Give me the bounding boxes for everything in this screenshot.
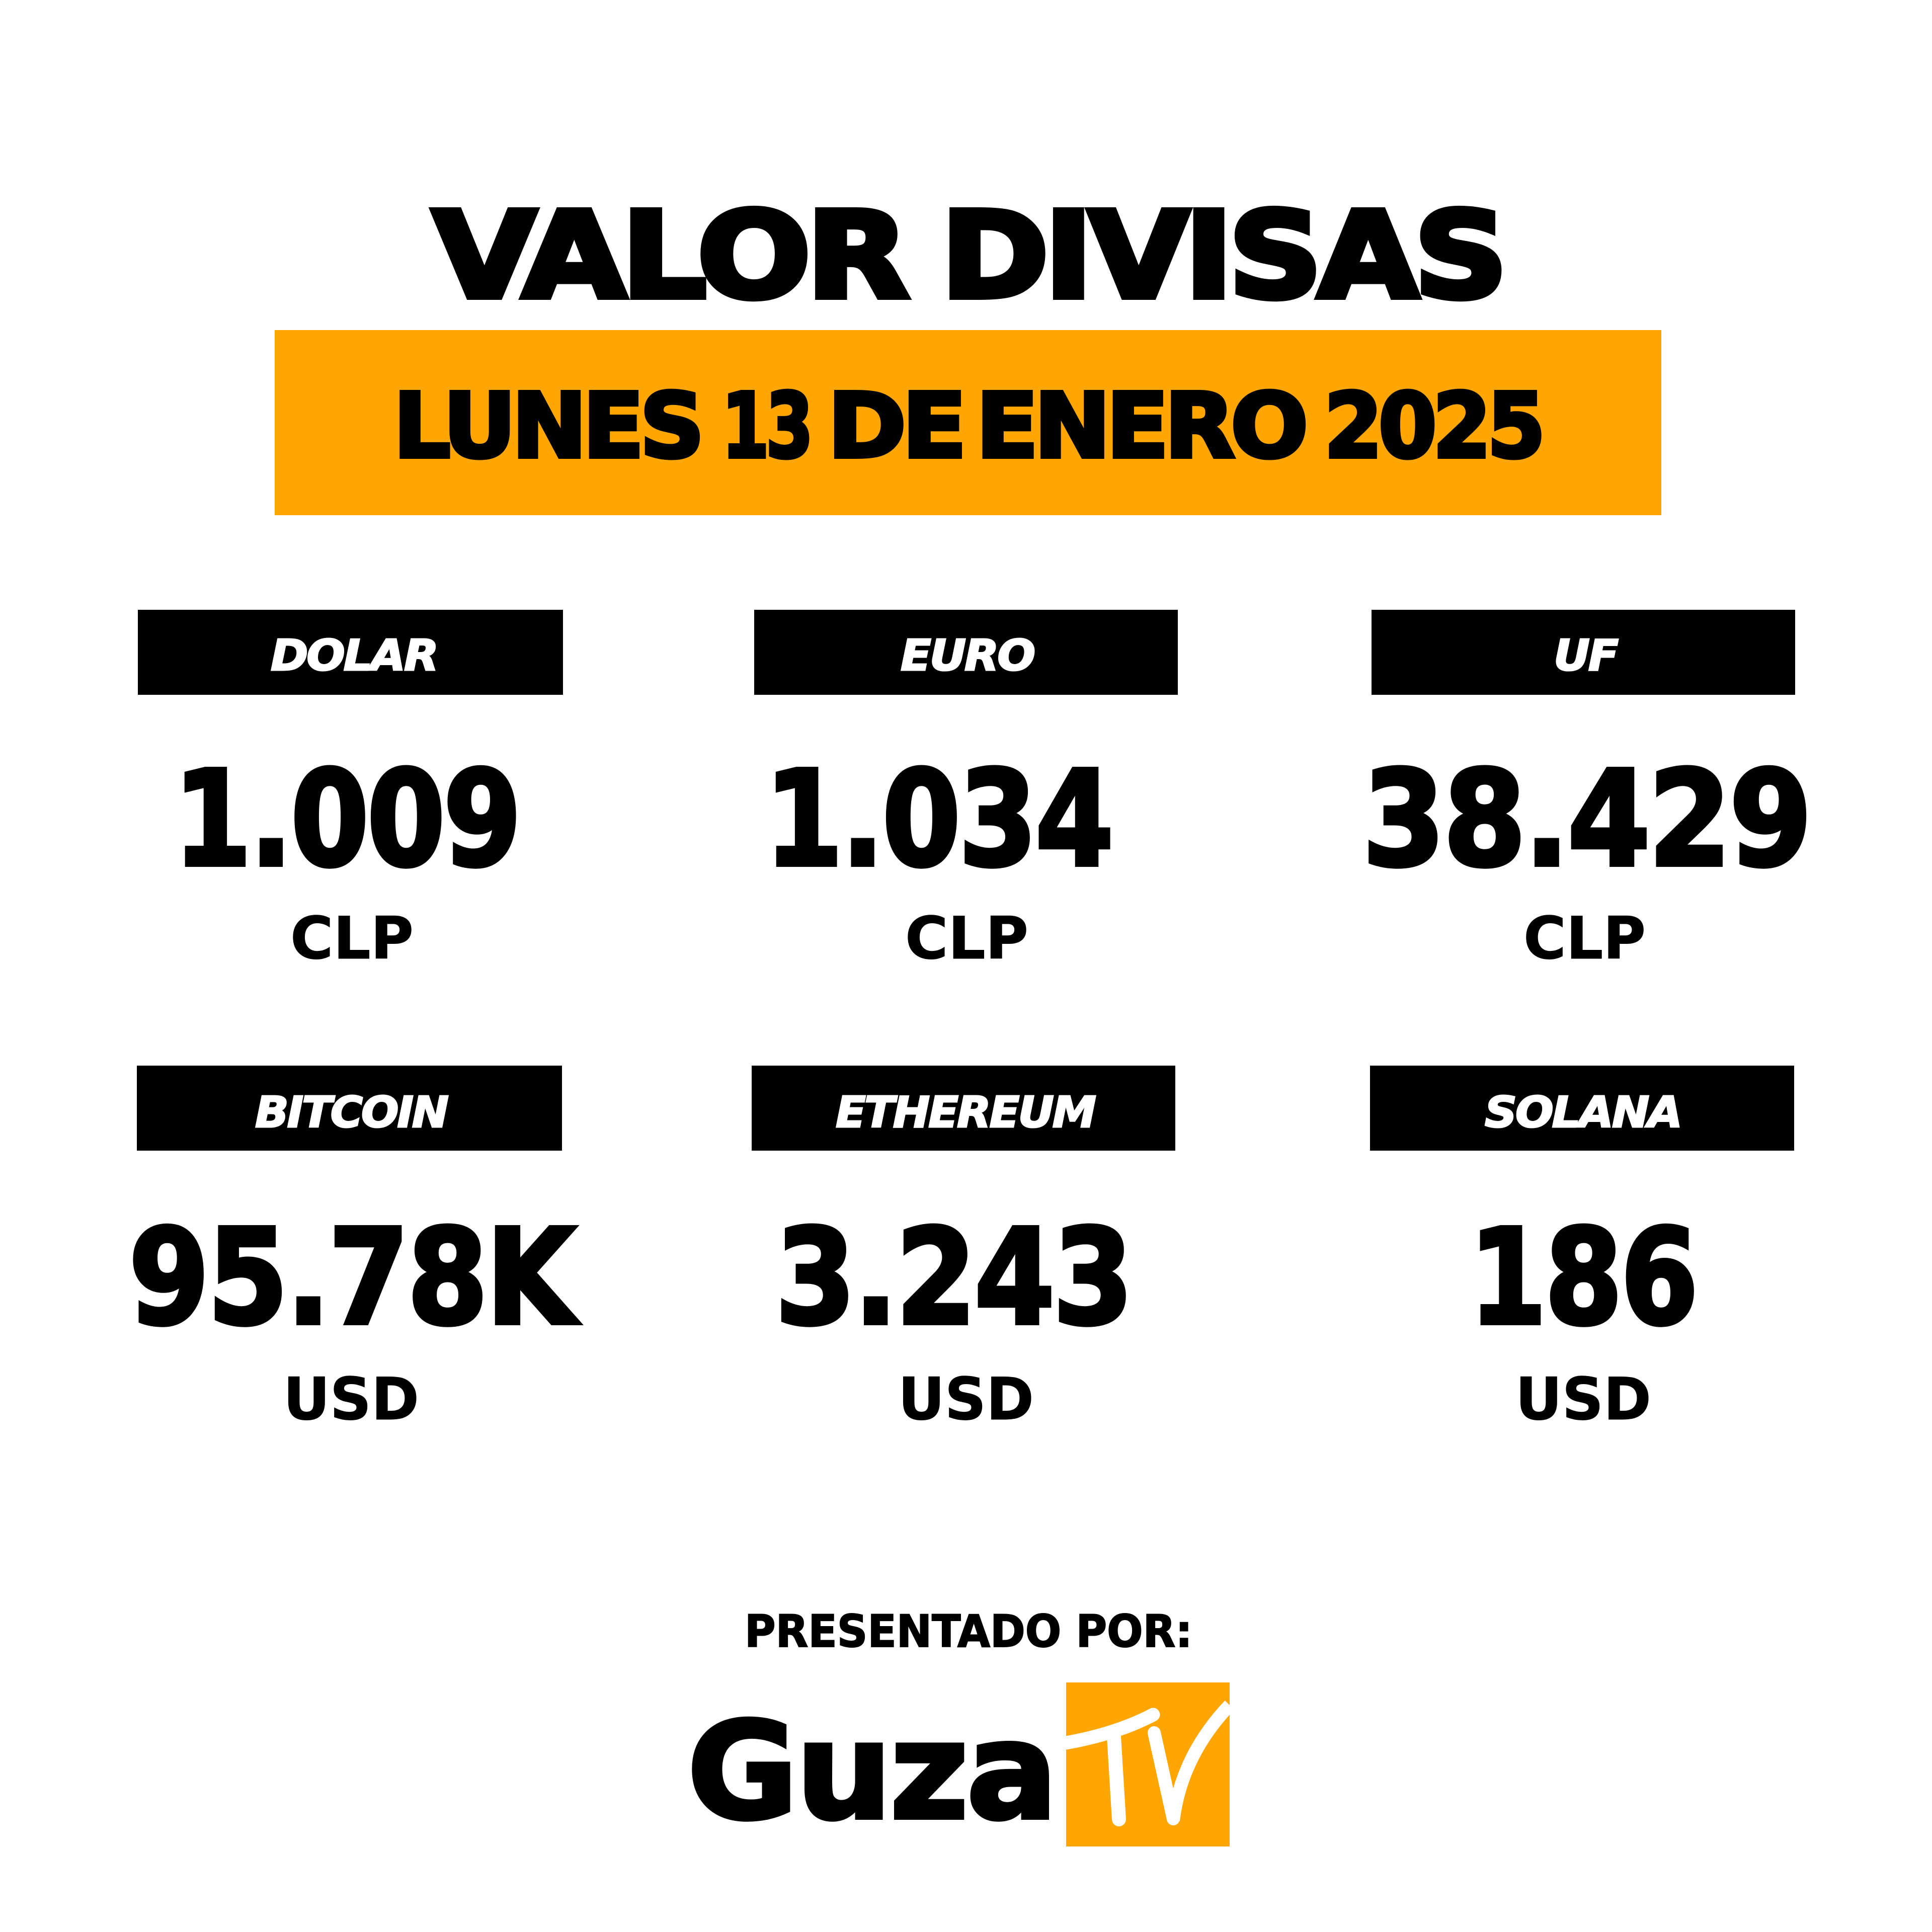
panel: uf: UF (1554, 631, 1618, 681)
title (433, 187, 1503, 325)
date text: 2025 (1324, 374, 1542, 478)
title: VALOR (433, 187, 907, 325)
panel: solana (1370, 1066, 1794, 1433)
panel: bitcoin: BITCOIN (255, 1088, 448, 1138)
panel: bitcoin (129, 1066, 580, 1433)
logo: GuzaTV: Guza (687, 1694, 1056, 1849)
panel: bitcoin: USD (283, 1365, 419, 1433)
date text: LUNES (393, 374, 700, 478)
panel: uf: 38.429 (1362, 743, 1810, 896)
panel: solana: USD (1515, 1365, 1651, 1433)
panel: bitcoin: 95.78K (129, 1201, 580, 1354)
title: DIVISAS (941, 187, 1503, 325)
date banner (275, 330, 1661, 515)
panel: ethereum: USD (898, 1365, 1034, 1433)
icon: TV square (1066, 1682, 1230, 1846)
panel: solana: SOLANA (1485, 1088, 1681, 1138)
panel: dolar: 1.009 (174, 743, 520, 896)
panel: euro: 1.034 (765, 743, 1112, 896)
panel: euro (754, 610, 1178, 973)
panel: dolar (138, 610, 563, 973)
panel: uf (1362, 610, 1810, 973)
panel: ethereum (752, 1066, 1175, 1433)
date text: 13 (722, 374, 810, 478)
logo: GuzaTV (687, 1682, 1230, 1849)
panel: ethereum: 3.243 (775, 1201, 1132, 1354)
panel: solana: 186 (1469, 1201, 1697, 1354)
panel: ethereum: ETHEREUM (836, 1088, 1095, 1138)
date text: ENERO (976, 374, 1304, 478)
panel: dolar: CLP (290, 905, 414, 973)
date text (393, 374, 1542, 478)
date text: DE (828, 374, 962, 478)
presented by text: PRESENTADO POR: (745, 1605, 1192, 1657)
panel: uf: CLP (1523, 905, 1646, 973)
panel: euro: CLP (905, 905, 1028, 973)
panel: dolar: DOLAR (271, 631, 437, 681)
panel: euro: EURO (901, 631, 1034, 681)
